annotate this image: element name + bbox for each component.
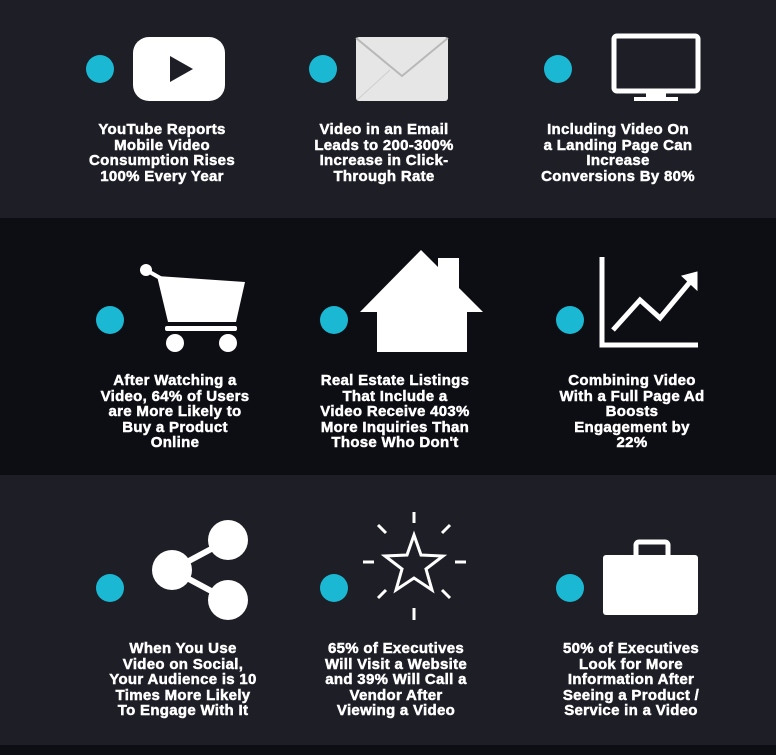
text 9: Look for More bbox=[579, 656, 683, 673]
text 1: YouTube Reports bbox=[98, 121, 226, 138]
text 8: Will Visit a Website bbox=[325, 656, 467, 673]
text 7: Times More Likely bbox=[116, 687, 250, 704]
text 5: Those Who Don't bbox=[331, 434, 459, 451]
text 3 bbox=[541, 121, 695, 185]
text 4 bbox=[100, 372, 249, 451]
text 5: That Include a bbox=[342, 388, 448, 405]
text 6: Engagement by bbox=[574, 419, 690, 436]
text 2: Increase in Click- bbox=[320, 152, 448, 169]
text 3: Conversions By 80% bbox=[541, 168, 695, 185]
text 8: Vendor After bbox=[349, 687, 443, 704]
text 6 bbox=[559, 372, 704, 451]
icon: chart bbox=[602, 257, 698, 345]
text 1 bbox=[89, 121, 235, 185]
text 5 bbox=[320, 372, 470, 451]
text 7: Your Audience is 10 bbox=[109, 671, 257, 688]
text 6: 22% bbox=[617, 434, 647, 451]
text 8: Viewing a Video bbox=[337, 702, 455, 719]
text 1: Consumption Rises bbox=[89, 152, 235, 169]
text 9: Information After bbox=[568, 671, 694, 688]
icon: youtube bbox=[133, 37, 225, 101]
text 2 bbox=[314, 121, 454, 185]
text 1: 100% Every Year bbox=[100, 168, 224, 185]
icon: cart bbox=[140, 264, 245, 352]
text 3: Increase bbox=[586, 152, 650, 169]
text 5: Video Receive 403% bbox=[320, 403, 470, 420]
text 4: After Watching a bbox=[113, 372, 237, 389]
text 6: With a Full Page Ad bbox=[559, 388, 704, 405]
text 1: Mobile Video bbox=[114, 137, 210, 154]
icon: briefcase bbox=[603, 542, 698, 615]
text 7: When You Use bbox=[129, 640, 237, 657]
text 4: Online bbox=[151, 434, 199, 451]
text 7 bbox=[109, 640, 257, 719]
text 5: More Inquiries Than bbox=[321, 419, 469, 436]
text 2: Leads to 200-300% bbox=[314, 137, 454, 154]
icon: monitor bbox=[614, 36, 698, 101]
icon: share bbox=[152, 520, 248, 620]
text 7: To Engage With It bbox=[118, 702, 248, 719]
text 9: 50% of Executives bbox=[563, 640, 699, 657]
dots bbox=[86, 55, 584, 602]
text 8 bbox=[324, 640, 467, 719]
text 2: Through Rate bbox=[333, 168, 435, 185]
text 6: Combining Video bbox=[568, 372, 696, 389]
icon: envelope bbox=[356, 37, 448, 101]
text 8: 65% of Executives bbox=[328, 640, 464, 657]
text 9: Service in a Video bbox=[564, 702, 698, 719]
text 3: Including Video On bbox=[547, 121, 689, 138]
text 7: Video on Social, bbox=[123, 656, 243, 673]
text 4: Buy a Product bbox=[122, 419, 228, 436]
text 4: are More Likely to bbox=[109, 403, 241, 420]
text 9 bbox=[563, 640, 699, 719]
text 2: Video in an Email bbox=[319, 121, 449, 138]
icon: star bbox=[363, 512, 466, 620]
text 3: a Landing Page Can bbox=[544, 137, 692, 154]
text 4: Video, 64% of Users bbox=[101, 388, 249, 405]
icon: house bbox=[360, 250, 483, 352]
text 9: Seeing a Product / bbox=[563, 687, 699, 704]
text 8: and 39% Will Call a bbox=[325, 671, 467, 688]
text 5: Real Estate Listings bbox=[321, 372, 469, 389]
text 6: Boosts bbox=[606, 403, 658, 420]
